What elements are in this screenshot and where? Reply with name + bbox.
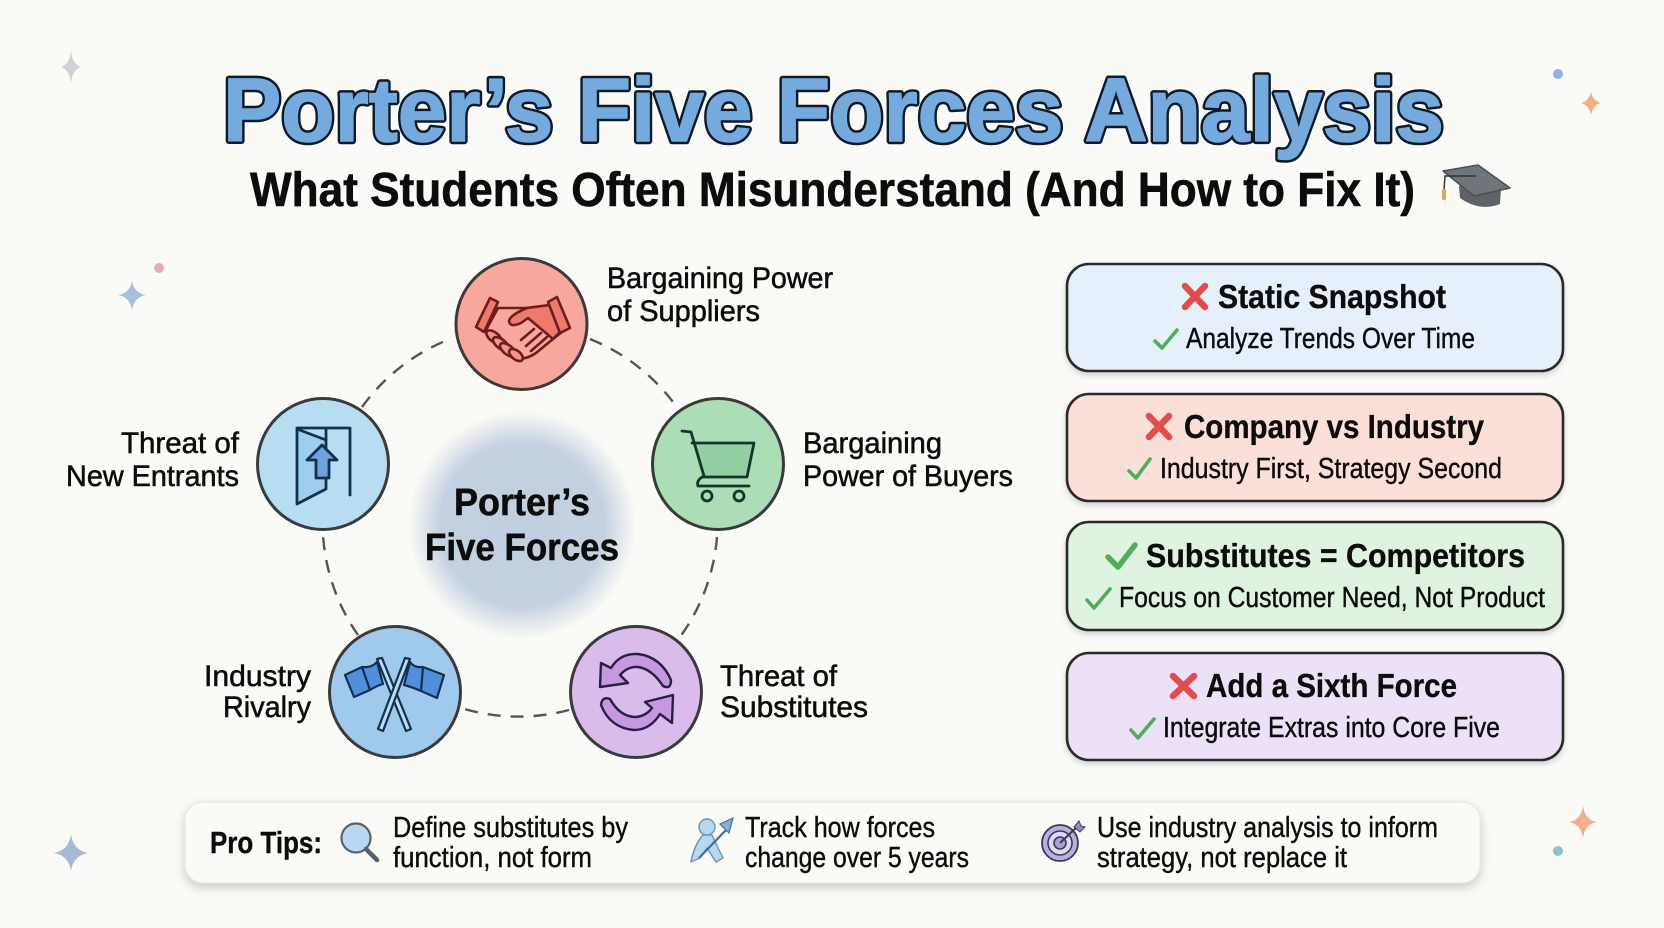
subtitle: What Students Often Misunderstand (And How to Fix It): [250, 164, 1415, 217]
dashed connector ring: [323, 339, 717, 717]
label: Threat of: [720, 660, 838, 693]
panel: company vs industry: [1067, 394, 1563, 501]
force: threat of substitutes: [570, 626, 868, 758]
icon: target: [1042, 821, 1085, 861]
label: [720, 660, 868, 724]
tip text: use industry analysis: Use industry analysis to inform: [1097, 812, 1438, 844]
label: Bargaining Power: [607, 262, 833, 295]
panel: substitutes equal competitors: Substitutes = Competitors: [1146, 538, 1525, 575]
heading: pro tips: Pro Tips:: [210, 825, 322, 860]
tip text: use industry analysis: strategy, not replace it: [1097, 842, 1347, 874]
panel: company vs industry: Company vs Industry: [1184, 409, 1484, 446]
panel: static snapshot: Analyze Trends Over Time: [1186, 323, 1475, 355]
panel: substitutes equal competitors: Focus on Customer Need, Not Product: [1119, 582, 1545, 614]
force: threat of new entrants: [66, 398, 388, 530]
panel: static snapshot: [1067, 264, 1563, 371]
label: Bargaining: [803, 427, 942, 460]
panel: static snapshot: Static Snapshot: [1218, 279, 1446, 316]
tip text: use industry analysis: [1097, 812, 1438, 874]
icon: cross: [1149, 416, 1169, 437]
label: [607, 262, 833, 328]
diagram: five forces cycle: [66, 258, 1013, 758]
icon: check: [1131, 719, 1154, 738]
icon: check: [1129, 459, 1150, 478]
label: Substitutes: [720, 691, 868, 724]
center glow with title: [408, 411, 636, 639]
title: Porter’s Five Forces Analysis: [223, 61, 1444, 161]
force: industry rivalry: [204, 626, 460, 758]
center glow with title: Porter’s: [454, 482, 590, 524]
label: Rivalry: [223, 691, 311, 724]
title: Porter’s Five Forces Analysis: [223, 61, 1444, 161]
icon: person with arrow: [691, 818, 733, 862]
icon: cross: [1173, 676, 1194, 696]
panel: substitutes equal competitors: [1067, 522, 1563, 630]
tip text: track forces: Track how forces: [745, 812, 935, 844]
label: [803, 427, 1013, 493]
label: New Entrants: [66, 460, 239, 493]
tip text: define substitutes: function, not form: [393, 842, 592, 874]
icon: check: [1155, 330, 1177, 348]
tip text: track forces: [745, 812, 969, 874]
label: of Suppliers: [607, 295, 760, 328]
tip text: define substitutes: Define substitutes by: [393, 812, 629, 844]
label: [204, 660, 311, 724]
icon: cycle arrows: [600, 654, 673, 730]
icon: door with arrow: [297, 428, 350, 504]
icon: shopping cart: [682, 431, 755, 501]
tip text: track forces: change over 5 years: [745, 842, 969, 874]
panel: add a sixth force: Integrate Extras into Core Five: [1163, 712, 1500, 744]
label: [66, 427, 240, 493]
icon: handshake: [476, 297, 570, 363]
panel: add a sixth force: [1067, 653, 1563, 760]
icon: cross: [1185, 286, 1205, 307]
panel: pro tips: [185, 802, 1480, 883]
icon: check: [1108, 545, 1135, 567]
icon: check: [1087, 589, 1110, 608]
label: Industry: [204, 660, 311, 693]
icon: graduation cap: [1442, 165, 1510, 207]
label: Power of Buyers: [803, 460, 1013, 493]
center glow with title: Five Forces: [425, 527, 619, 569]
force: bargaining power of suppliers: [456, 258, 833, 390]
icon: crossed flags: [345, 658, 444, 731]
panel: company vs industry: Industry First, Strategy Second: [1160, 453, 1502, 485]
force: bargaining power of buyers: [652, 398, 1013, 530]
panel: add a sixth force: Add a Sixth Force: [1206, 668, 1457, 705]
icon: magnifying glass: [342, 824, 377, 860]
tip text: define substitutes: [393, 812, 629, 874]
label: Threat of: [121, 427, 240, 460]
